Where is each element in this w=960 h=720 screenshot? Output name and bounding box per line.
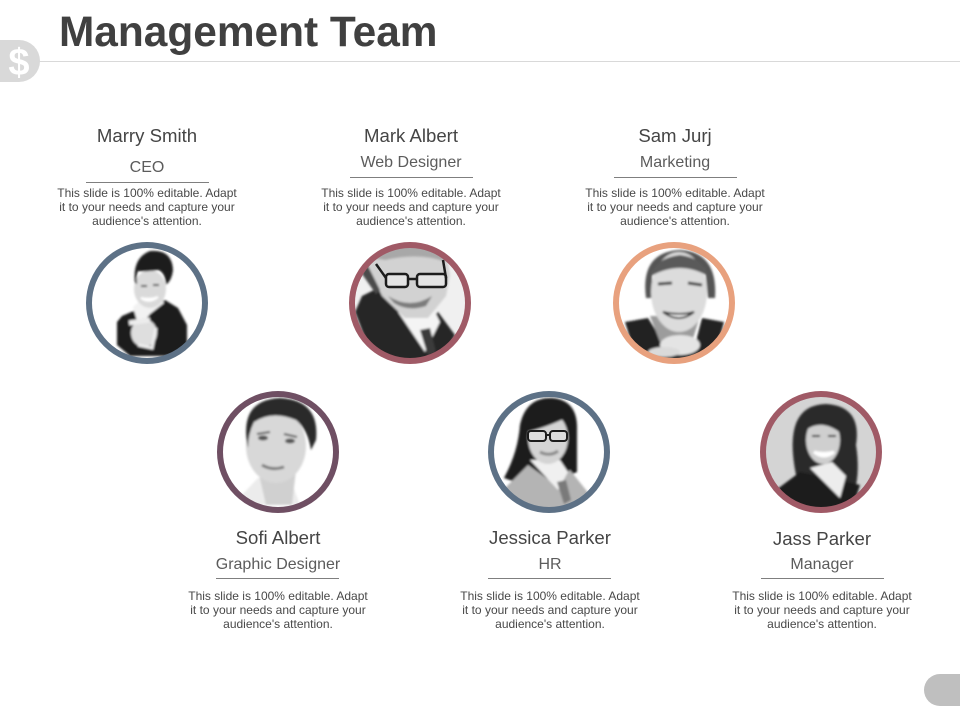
name: Jessica Parker <box>489 527 611 548</box>
ring <box>220 394 336 510</box>
description: it to your needs and capture your <box>587 200 763 214</box>
description: This slide is 100% editable. Adapt <box>460 589 640 603</box>
ring <box>763 394 879 510</box>
role: HR <box>538 556 562 573</box>
title: Management Team <box>59 8 437 55</box>
portrait <box>352 244 468 365</box>
header rule <box>38 61 960 62</box>
portrait <box>220 394 336 510</box>
description: audience's attention. <box>223 617 333 631</box>
role: CEO <box>130 159 164 176</box>
portrait <box>616 245 732 361</box>
description: audience's attention. <box>767 617 877 631</box>
description: it to your needs and capture your <box>59 200 235 214</box>
description: This slide is 100% editable. Adapt <box>57 186 237 200</box>
name: Marry Smith <box>97 125 197 146</box>
description: audience's attention. <box>495 617 605 631</box>
ring <box>491 394 607 510</box>
description: This slide is 100% editable. Adapt <box>321 186 501 200</box>
profile: Sofi Albert <box>188 394 368 631</box>
name: Mark Albert <box>364 125 459 146</box>
ring <box>89 245 205 361</box>
role: Web Designer <box>360 154 462 171</box>
portrait <box>89 245 205 361</box>
page number tab <box>924 674 960 706</box>
portrait <box>491 394 607 515</box>
name: Jass Parker <box>773 528 871 549</box>
name: Sofi Albert <box>236 527 321 548</box>
description: audience's attention. <box>620 214 730 228</box>
profile: Jass Parker <box>732 394 912 631</box>
description: This slide is 100% editable. Adapt <box>585 186 765 200</box>
description: This slide is 100% editable. Adapt <box>188 589 368 603</box>
description: audience's attention. <box>356 214 466 228</box>
role: Marketing <box>640 154 710 171</box>
profile: Mark Albert <box>321 125 501 365</box>
ring <box>352 245 468 361</box>
description: it to your needs and capture your <box>734 603 910 617</box>
icon: dollar badge <box>0 40 40 84</box>
portrait <box>763 394 879 510</box>
profile: Jessica Parker <box>460 394 640 631</box>
role: Graphic Designer <box>216 556 341 573</box>
description: it to your needs and capture your <box>323 200 499 214</box>
profile: Marry Smith <box>57 125 237 361</box>
description: it to your needs and capture your <box>190 603 366 617</box>
description: This slide is 100% editable. Adapt <box>732 589 912 603</box>
role: Manager <box>790 556 854 573</box>
description: audience's attention. <box>92 214 202 228</box>
profile: Sam Jurj <box>585 125 765 361</box>
description: it to your needs and capture your <box>462 603 638 617</box>
name: Sam Jurj <box>638 125 712 146</box>
icon: dollar badge: $ <box>8 42 30 84</box>
ring <box>616 245 732 361</box>
